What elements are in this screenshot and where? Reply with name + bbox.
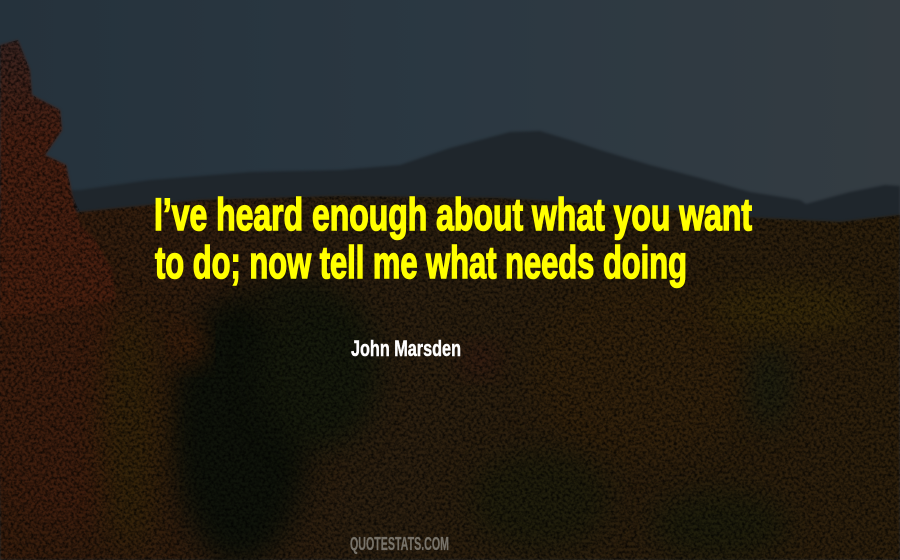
- watermark: QUOTESTATS.COM: [350, 534, 449, 554]
- quote text: [154, 189, 752, 288]
- background: autumn forest: [0, 196, 900, 560]
- author name: John Marsden: [351, 336, 461, 361]
- background: distant mountain ridge: [0, 131, 900, 260]
- background: red autumn tree at left edge: [0, 40, 115, 320]
